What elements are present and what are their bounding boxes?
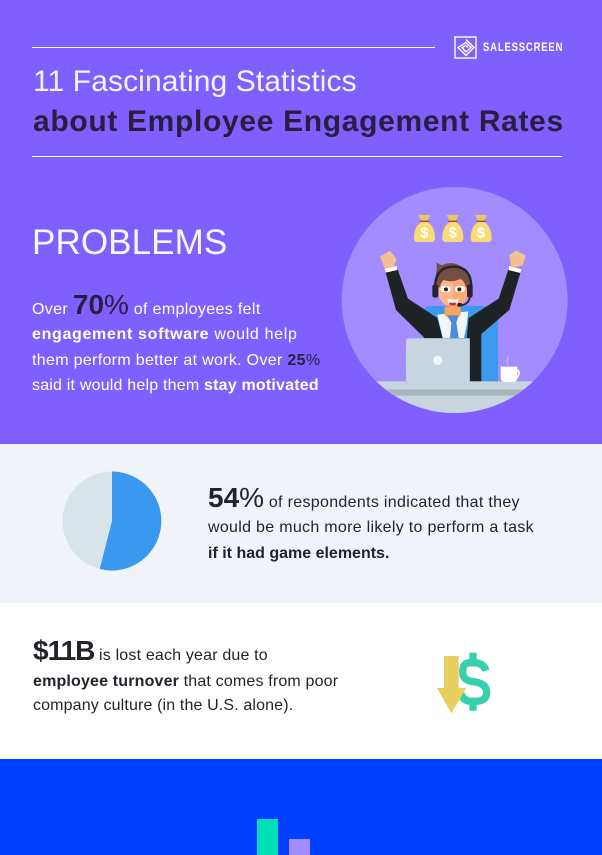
text block: engagement software: said it would help them stay motivated bbox=[32, 377, 319, 394]
text block: $11B: employee turnover that comes from poor bbox=[33, 673, 338, 690]
panel: 54% game elements bbox=[0, 444, 602, 603]
panel: $11B turnover bbox=[0, 603, 602, 759]
text block: $11B: $11B is lost each year due to bbox=[33, 635, 268, 666]
title: about Employee Engagement Rates bbox=[33, 105, 564, 138]
heading: problems: PROBLEMS bbox=[32, 223, 227, 262]
bar: green bbox=[257, 819, 278, 855]
text block: engagement software bbox=[32, 289, 320, 394]
illustration: celebrating employee: $ bbox=[449, 225, 457, 241]
title bbox=[33, 65, 564, 138]
text block: 54% bbox=[208, 482, 534, 562]
text block: 54%: would be much more likely to perform a task bbox=[208, 519, 534, 536]
illustration: celebrating employee bbox=[342, 187, 568, 413]
pie chart: 54% bbox=[62, 472, 162, 570]
text block: 54%: if it had game elements. bbox=[208, 545, 389, 562]
text block: engagement software: them perform better at work. Over 25% bbox=[32, 352, 320, 369]
text block: engagement software: Over 70% of employees felt bbox=[32, 289, 261, 320]
logo: SalesScreen: SALESSCREEN bbox=[483, 42, 563, 54]
text block: 54%: 54% of respondents indicated that they bbox=[208, 482, 520, 513]
text block: engagement software: engagement software would help bbox=[32, 326, 298, 343]
logo: SalesScreen bbox=[454, 36, 563, 59]
text block: $11B bbox=[33, 635, 338, 714]
illustration: celebrating employee: $ bbox=[477, 225, 485, 241]
text block: $11B: company culture (in the U.S. alone). bbox=[33, 697, 293, 714]
title: 11 Fascinating Statistics bbox=[33, 65, 357, 98]
panel: header and problems bbox=[0, 0, 602, 444]
illustration: celebrating employee: $ bbox=[420, 225, 428, 241]
bar: lilac bbox=[289, 839, 310, 855]
panel: blue chart section bbox=[0, 759, 602, 855]
icon: falling dollar bbox=[437, 652, 490, 714]
